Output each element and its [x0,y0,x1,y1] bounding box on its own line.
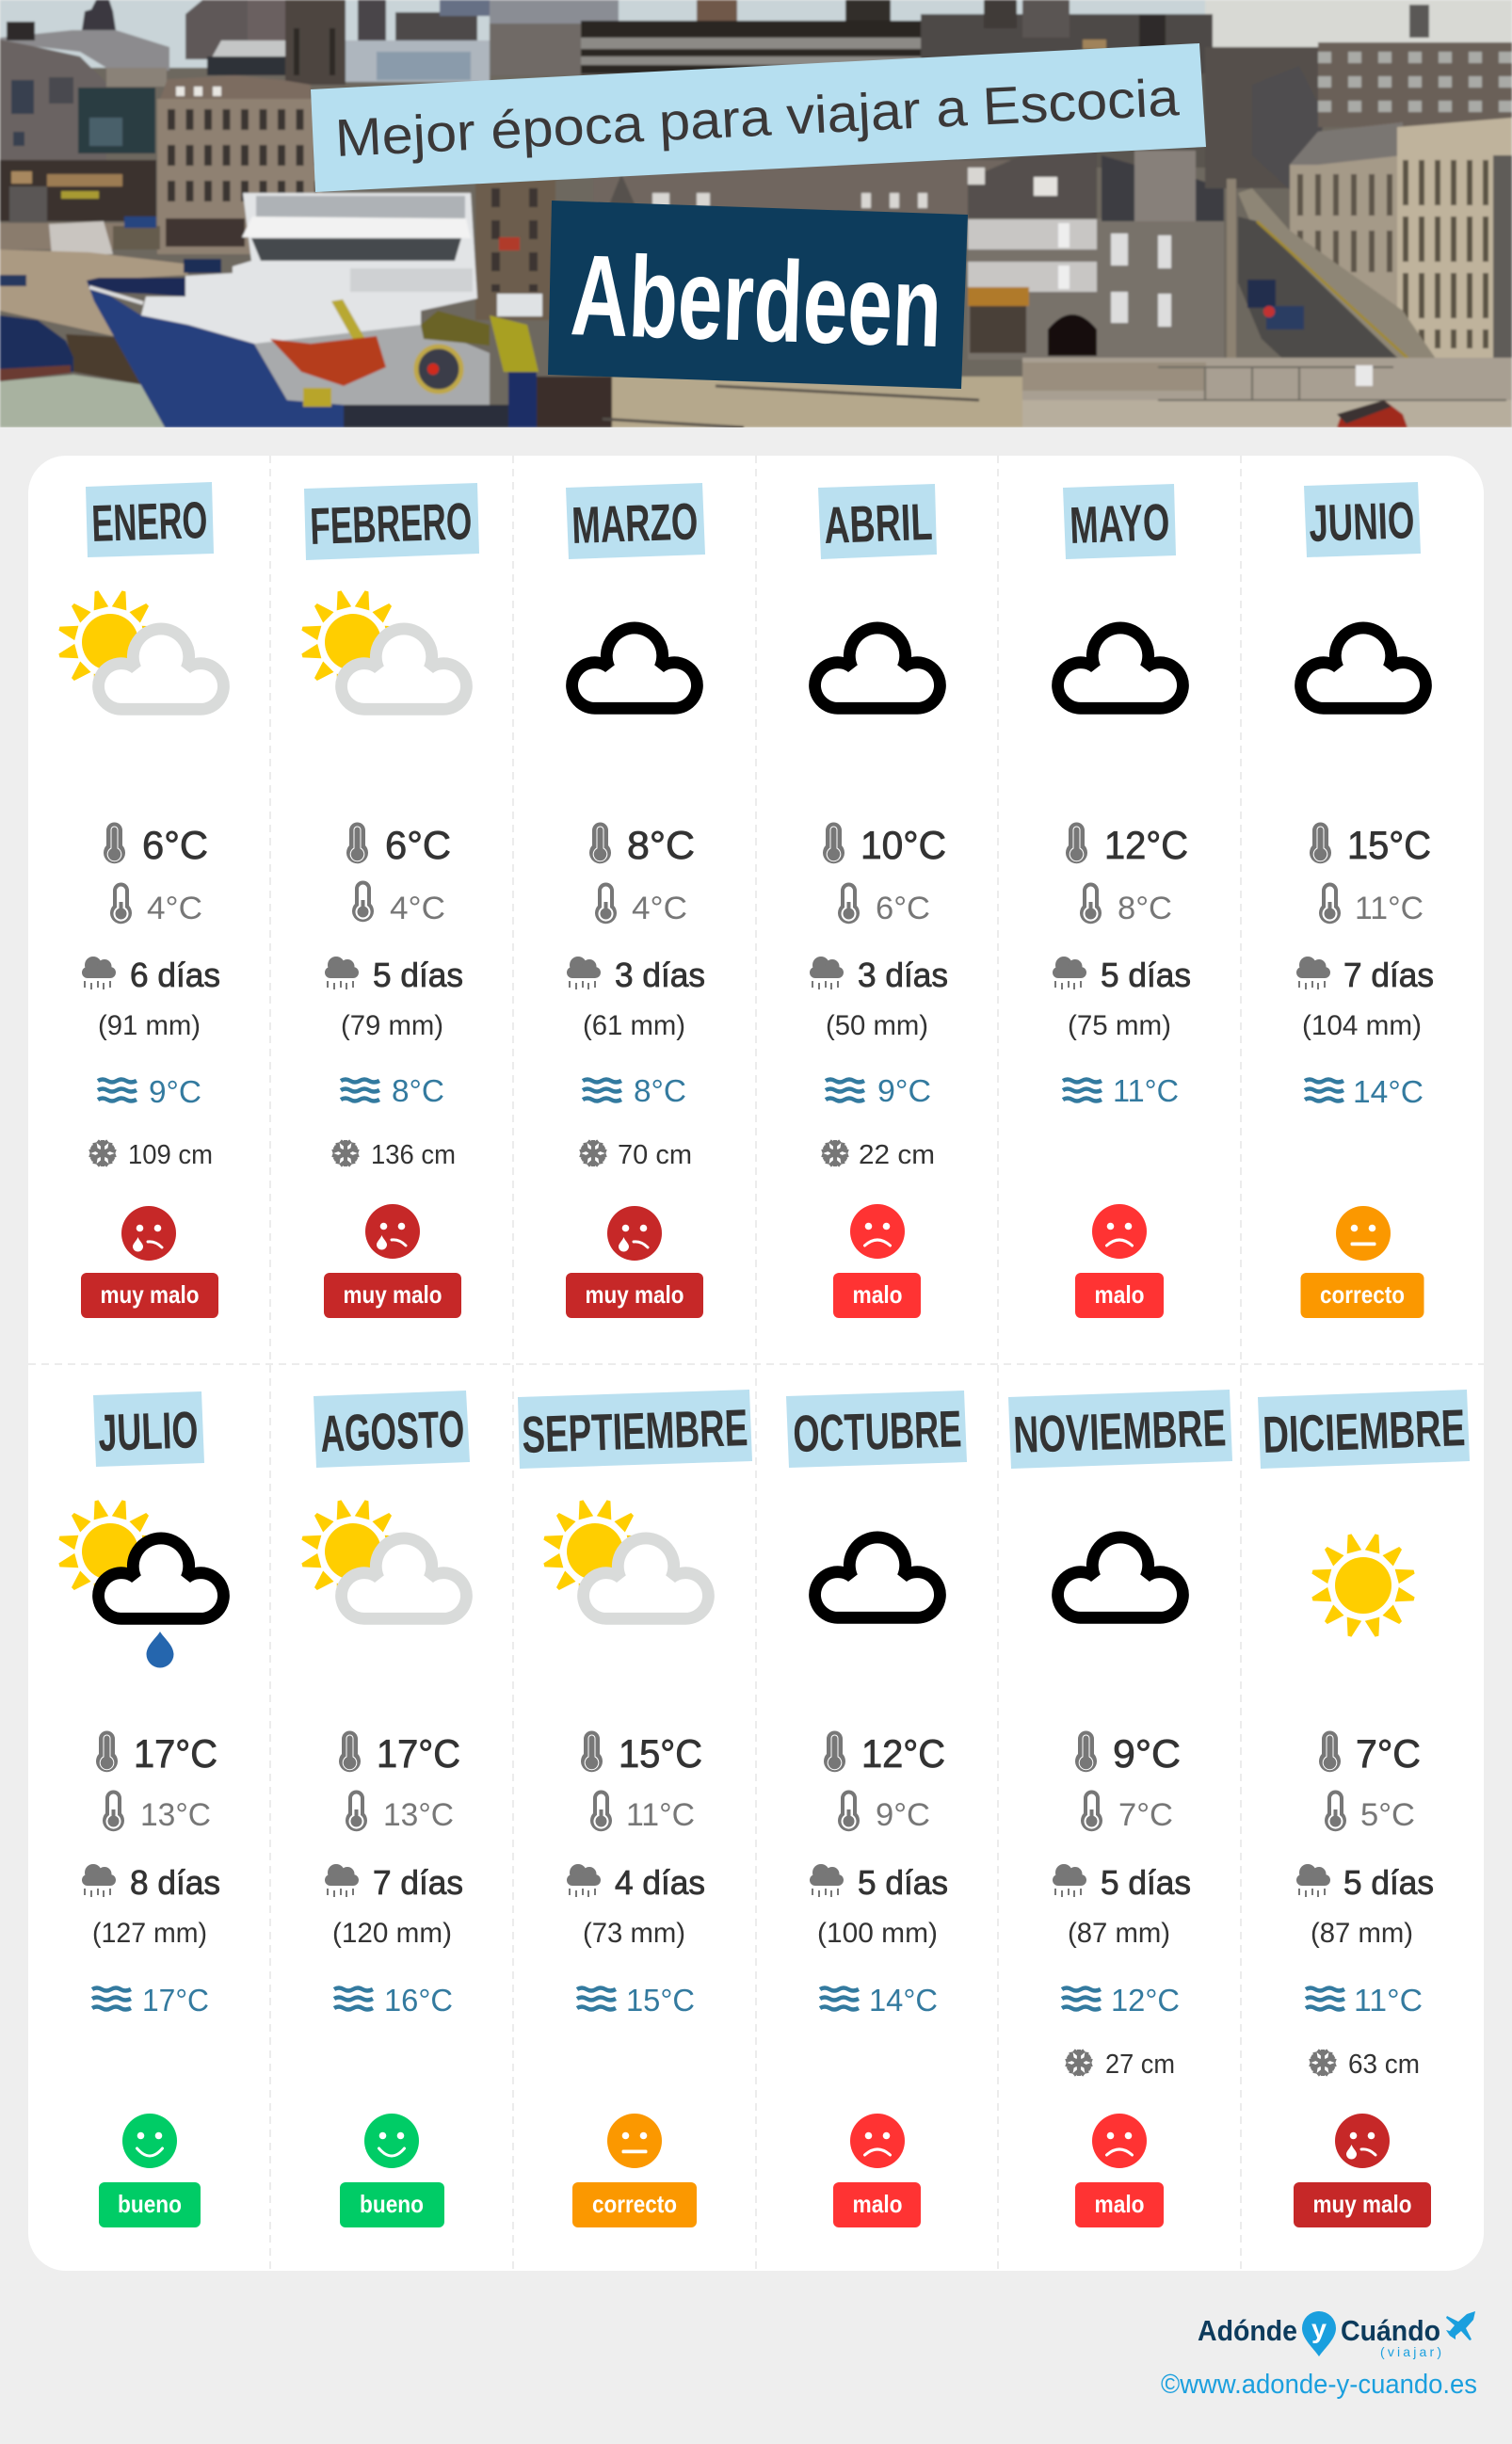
rating label [81,1273,218,1318]
sea temperature: 11°C [1354,1983,1423,2018]
high temperature [339,1730,460,1776]
low temperature [352,881,445,926]
rain days: 8 días [130,1863,220,1902]
column: febrero [300,589,466,1318]
high temperature [823,823,946,867]
rain days: 7 días [1343,956,1434,994]
icon: sun and grey cloud [300,589,466,709]
high temperature: 15°C [1347,823,1431,867]
rain days [1053,1863,1191,1902]
low temperature: 5°C [1360,1797,1415,1833]
heading: enero [86,482,214,557]
snow: 136 cm [371,1140,456,1170]
column: noviembre [1053,1537,1191,2227]
sea temperature [1306,1983,1423,2018]
rating label: bueno [360,2190,424,2218]
rating face [1336,1206,1391,1261]
heading: marzo [566,483,705,559]
snow: 27 cm [1105,2050,1175,2080]
rainfall: (61 mm) [583,1010,685,1041]
heading: enero: ENERO [90,490,208,553]
heading: abril [818,484,937,559]
rating label: malo [1094,2190,1145,2218]
icon: cloud [1058,628,1182,708]
sea temperature [1063,1073,1179,1108]
snow [1065,2050,1175,2080]
rating face [122,2114,177,2168]
rating label [99,2182,201,2227]
heading: noviembre: NOVIEMBRE [1012,1398,1227,1464]
rain days: 3 días [858,956,948,994]
rating face [1092,1204,1147,1259]
high temperature: 12°C [1104,823,1188,867]
rain days [810,1863,948,1902]
column: enero [57,589,223,1318]
low temperature: 4°C [147,891,202,926]
low temperature: 11°C [626,1797,695,1833]
high temperature: 17°C [377,1731,460,1776]
rainfall: (104 mm) [1302,1010,1422,1041]
icon: sun, black cloud and rain drop [57,1499,223,1668]
sea temperature: 17°C [142,1983,209,2018]
rating label: bueno [118,2190,182,2218]
rating face [607,1206,662,1261]
rating label: muy malo [1312,2190,1412,2218]
rating label: malo [853,1280,902,1309]
low temperature [838,883,930,926]
rating face [364,2114,419,2168]
rain days: 4 días [615,1863,705,1902]
low temperature [1325,1791,1415,1833]
sea temperature [826,1073,931,1108]
rainfall: (87 mm) [1068,1918,1170,1949]
high temperature [1075,1730,1181,1776]
high temperature: 7°C [1356,1731,1421,1776]
rainfall: (87 mm) [1311,1918,1413,1949]
rating label [1075,2182,1164,2227]
low temperature: 9°C [876,1797,930,1833]
column: octubre [810,1537,948,2227]
rating label: malo [1094,1280,1145,1309]
heading: septiembre [518,1390,752,1469]
snow: 70 cm [618,1140,692,1170]
high temperature: 15°C [619,1731,702,1776]
sea temperature: 12°C [1111,1983,1180,2018]
column: julio [57,1499,223,2227]
rain days [1053,956,1191,994]
rainfall: (73 mm) [583,1918,685,1949]
heading: julio: JULIO [97,1400,199,1462]
snow [579,1140,692,1170]
logo: Adónde y Cuándo: Adónde [1198,2314,1297,2347]
low temperature: 7°C [1118,1797,1173,1833]
rain days: 5 días [1343,1863,1434,1902]
icon: sun and grey cloud [542,1499,708,1618]
low temperature [103,1791,211,1833]
heading: marzo: MARZO [571,491,699,555]
high temperature: 17°C [134,1731,217,1776]
sea temperature [98,1074,201,1109]
column: agosto [300,1499,466,2227]
low temperature [110,883,202,926]
rating label [1294,2182,1431,2227]
title banner: Mejor época para viajar a Escocia [334,67,1181,168]
sea temperature [820,1983,938,2018]
icon: cloud [1058,1537,1182,1617]
heading: agosto: AGOSTO [319,1399,465,1463]
high temperature [1319,1730,1421,1776]
sea temperature: 9°C [149,1074,201,1109]
low temperature [595,883,687,926]
rating label: malo [853,2190,902,2218]
rainfall: (75 mm) [1068,1010,1171,1041]
rating label [1301,1273,1424,1318]
main panel [28,456,1484,2271]
logo: Adónde y Cuándo: (viajar) [1380,2344,1441,2359]
rating label [833,1273,921,1318]
sea temperature [577,1983,695,2018]
rain days: 5 días [858,1863,948,1902]
rainfall: (91 mm) [98,1010,201,1041]
sea temperature [1305,1074,1424,1109]
column: diciembre [1294,1533,1434,2227]
high temperature [824,1730,945,1776]
sea temperature: 14°C [1353,1074,1424,1109]
icon: cloud [815,1537,940,1617]
low temperature [838,1791,930,1833]
rating face [1092,2114,1147,2168]
snow [821,1140,935,1170]
column: abril [810,628,948,1318]
logo: Adónde y Cuándo: y [1311,2314,1327,2343]
rain days [82,1863,220,1902]
rain days: 5 días [1101,956,1191,994]
rain days [82,956,220,994]
rainfall: (79 mm) [341,1010,443,1041]
heading: junio [1304,482,1421,557]
city name banner [548,201,968,389]
low temperature: 13°C [383,1797,454,1833]
rating label: muy malo [586,1280,684,1309]
low temperature: 8°C [1118,891,1172,926]
rainfall: (100 mm) [817,1918,938,1949]
sea temperature: 8°C [634,1073,686,1108]
sea temperature: 8°C [392,1073,444,1108]
snow: 109 cm [128,1140,213,1170]
sea temperature [1062,1983,1180,2018]
rainfall: (127 mm) [92,1918,207,1949]
column: junio [1296,628,1434,1318]
high temperature [589,823,695,867]
sea temperature [341,1073,444,1108]
rating label [1075,1273,1164,1318]
sea temperature: 9°C [877,1073,931,1108]
high temperature [104,823,208,867]
rating face [850,2114,905,2168]
heading: agosto [314,1391,470,1468]
heading: febrero: FEBRERO [309,491,473,555]
high temperature [346,823,451,867]
heading: julio [93,1391,204,1467]
column: mayo [1053,628,1191,1318]
heading: febrero [304,483,479,560]
rating face [850,1204,905,1259]
snow [331,1140,456,1170]
rating label [833,2182,921,2227]
icon: cloud [1301,628,1425,708]
rain days [567,956,705,994]
rain days [325,1863,463,1902]
high temperature: 9°C [1113,1731,1181,1776]
rain days [1296,1863,1434,1902]
icon: cloud [815,628,940,708]
sea temperature: 15°C [626,1983,695,2018]
rain days: 5 días [1101,1863,1191,1902]
rating face [121,1206,176,1261]
column: marzo [566,628,705,1318]
snow: 63 cm [1348,2050,1420,2080]
high temperature [1310,823,1431,867]
high temperature [96,1730,217,1776]
icon: sun [1311,1533,1416,1638]
heading: septiembre: SEPTIEMBRE [521,1398,748,1464]
month headings [86,482,1470,1469]
heading: noviembre [1008,1390,1232,1469]
high temperature [1066,823,1188,867]
rain days [325,956,463,994]
rating label [340,2182,444,2227]
city name banner: Aberdeen [569,231,943,371]
sea temperature: 14°C [869,1983,938,2018]
low temperature [590,1791,695,1833]
heading: abril: ABRIL [823,492,933,555]
rating label: muy malo [343,1280,442,1309]
rainfall: (120 mm) [332,1918,452,1949]
icon: sun and grey cloud [300,1499,466,1618]
rating label: muy malo [100,1280,200,1309]
heading: junio: JUNIO [1308,490,1415,553]
rain days: 5 días [373,956,463,994]
high temperature: 6°C [142,823,208,867]
sea temperature [92,1983,209,2018]
high temperature: 6°C [385,823,451,867]
rating label [572,2182,697,2227]
low temperature: 13°C [140,1797,211,1833]
snow [88,1140,213,1170]
sea temperature [334,1983,453,2018]
icon: cloud [572,628,697,708]
logo: Adónde y Cuándo: Cuándo [1341,2314,1440,2347]
rating face [1335,2114,1390,2168]
low temperature [1319,883,1424,926]
low temperature: 11°C [1355,891,1424,926]
website credit: ©www.adonde-y-cuando.es [1161,2370,1477,2400]
low temperature: 6°C [876,891,930,926]
header photo: Aberdeen harbour [0,0,1512,427]
high temperature: 12°C [861,1731,945,1776]
title banner [311,43,1206,192]
rating label [566,1273,703,1318]
rating face [365,1204,420,1259]
rain days: 3 días [615,956,705,994]
rain days: 6 días [130,956,220,994]
sea temperature: 11°C [1113,1073,1179,1108]
heading: octubre [786,1391,967,1468]
sea temperature: 16°C [384,1983,453,2018]
heading: mayo: MAYO [1069,492,1170,555]
icon: sun and grey cloud [57,589,223,709]
high temperature [581,1730,702,1776]
high temperature: 8°C [627,823,695,867]
column: septiembre [542,1499,708,2227]
low temperature [346,1791,454,1833]
rating face [607,2114,662,2168]
high temperature: 10°C [861,823,946,867]
low temperature [1080,883,1172,926]
logo: Adónde y Cuándo [1198,2311,1475,2359]
low temperature [1081,1791,1173,1833]
rain days [810,956,948,994]
low temperature: 4°C [390,891,445,926]
heading: octubre: OCTUBRE [792,1399,962,1463]
rain days: 7 días [373,1863,463,1902]
rain days [567,1863,705,1902]
rain days [1296,956,1434,994]
snow [1309,2050,1420,2080]
rating label: correcto [1320,1280,1405,1309]
heading: mayo [1063,484,1176,559]
low temperature: 4°C [632,891,687,926]
sea temperature [583,1073,686,1108]
rainfall: (50 mm) [826,1010,928,1041]
snow: 22 cm [859,1140,935,1170]
rating label [324,1273,461,1318]
rating label: correcto [592,2190,677,2218]
